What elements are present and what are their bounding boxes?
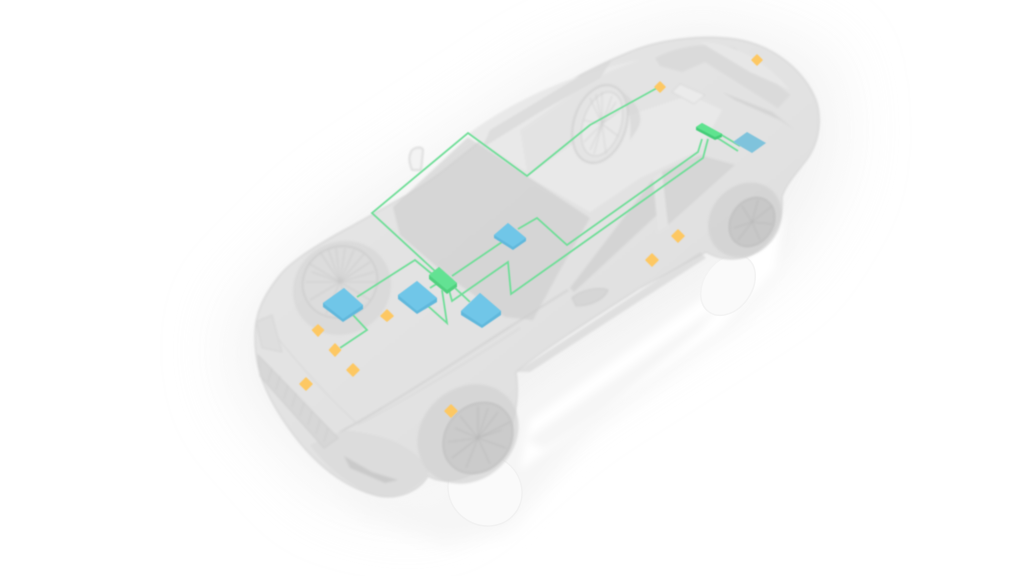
hood line bbox=[262, 318, 520, 424]
near rear side window bbox=[662, 155, 735, 225]
sensor bbox=[672, 230, 684, 242]
wire: front module to sensor bbox=[340, 315, 367, 348]
blue module 5 bbox=[733, 132, 766, 153]
wire: hub to left module zigzag bbox=[428, 290, 447, 323]
side mirror near bbox=[572, 288, 608, 306]
far front wheel bbox=[276, 223, 408, 353]
dashboard band bbox=[410, 172, 500, 240]
far side window bbox=[482, 60, 612, 148]
control modules bbox=[323, 123, 766, 328]
wheels bbox=[276, 78, 797, 504]
roof glass band bbox=[468, 60, 640, 172]
sensor bbox=[646, 254, 658, 266]
blue module 4 bbox=[494, 223, 526, 250]
body silhouette bbox=[255, 37, 819, 497]
far rear wheel well bbox=[620, 90, 640, 140]
soft ground shadow bbox=[235, 20, 835, 510]
blue module 3 bbox=[461, 293, 501, 328]
interior floor highlight bbox=[527, 95, 722, 212]
near front wheel bbox=[397, 364, 539, 504]
near front side window bbox=[570, 178, 658, 292]
floor reflection bbox=[330, 205, 790, 545]
front bumper dark bbox=[310, 430, 430, 496]
sensor bbox=[312, 325, 324, 336]
near rear wheel bbox=[693, 168, 797, 272]
blue module 1 bbox=[323, 288, 363, 322]
wire: front module to hub bbox=[357, 260, 432, 297]
sensor bbox=[752, 55, 762, 65]
far rear wheel bbox=[563, 78, 640, 170]
sensor bbox=[381, 310, 393, 321]
wire: left module to hub bbox=[430, 283, 438, 288]
side mirror far bbox=[409, 147, 423, 170]
rear deck detail bbox=[672, 84, 705, 104]
side skirt shading bbox=[516, 252, 706, 372]
wire: hub to central module to rear hub bbox=[452, 139, 702, 276]
windshield bbox=[393, 137, 590, 320]
wire: hub zigzag to rear hub bbox=[449, 139, 708, 301]
front grille bbox=[258, 355, 338, 448]
sensor bbox=[347, 364, 359, 376]
car body bbox=[255, 37, 819, 497]
wire: hub to right module bbox=[455, 288, 470, 302]
wire: rear hub to rear module bbox=[716, 137, 738, 151]
headlight bbox=[256, 315, 282, 352]
sensor bbox=[655, 82, 665, 92]
hood crease bbox=[340, 290, 568, 432]
green hub front bbox=[429, 267, 457, 294]
amber sensors bbox=[300, 55, 762, 417]
door pillar bbox=[653, 172, 668, 232]
wheel reflection rear bbox=[689, 244, 767, 326]
blue module 2 bbox=[398, 281, 437, 314]
sensor bbox=[300, 378, 312, 390]
sensor bbox=[330, 344, 340, 356]
green hub rear bbox=[696, 123, 722, 140]
wiring network bbox=[340, 88, 740, 348]
wheel reflection front bbox=[434, 440, 536, 540]
sensor bbox=[445, 405, 457, 417]
wire: rear hub to rear module second bbox=[720, 134, 740, 146]
wire: loop to rear sensor bbox=[372, 88, 657, 272]
rear window bbox=[655, 45, 790, 108]
